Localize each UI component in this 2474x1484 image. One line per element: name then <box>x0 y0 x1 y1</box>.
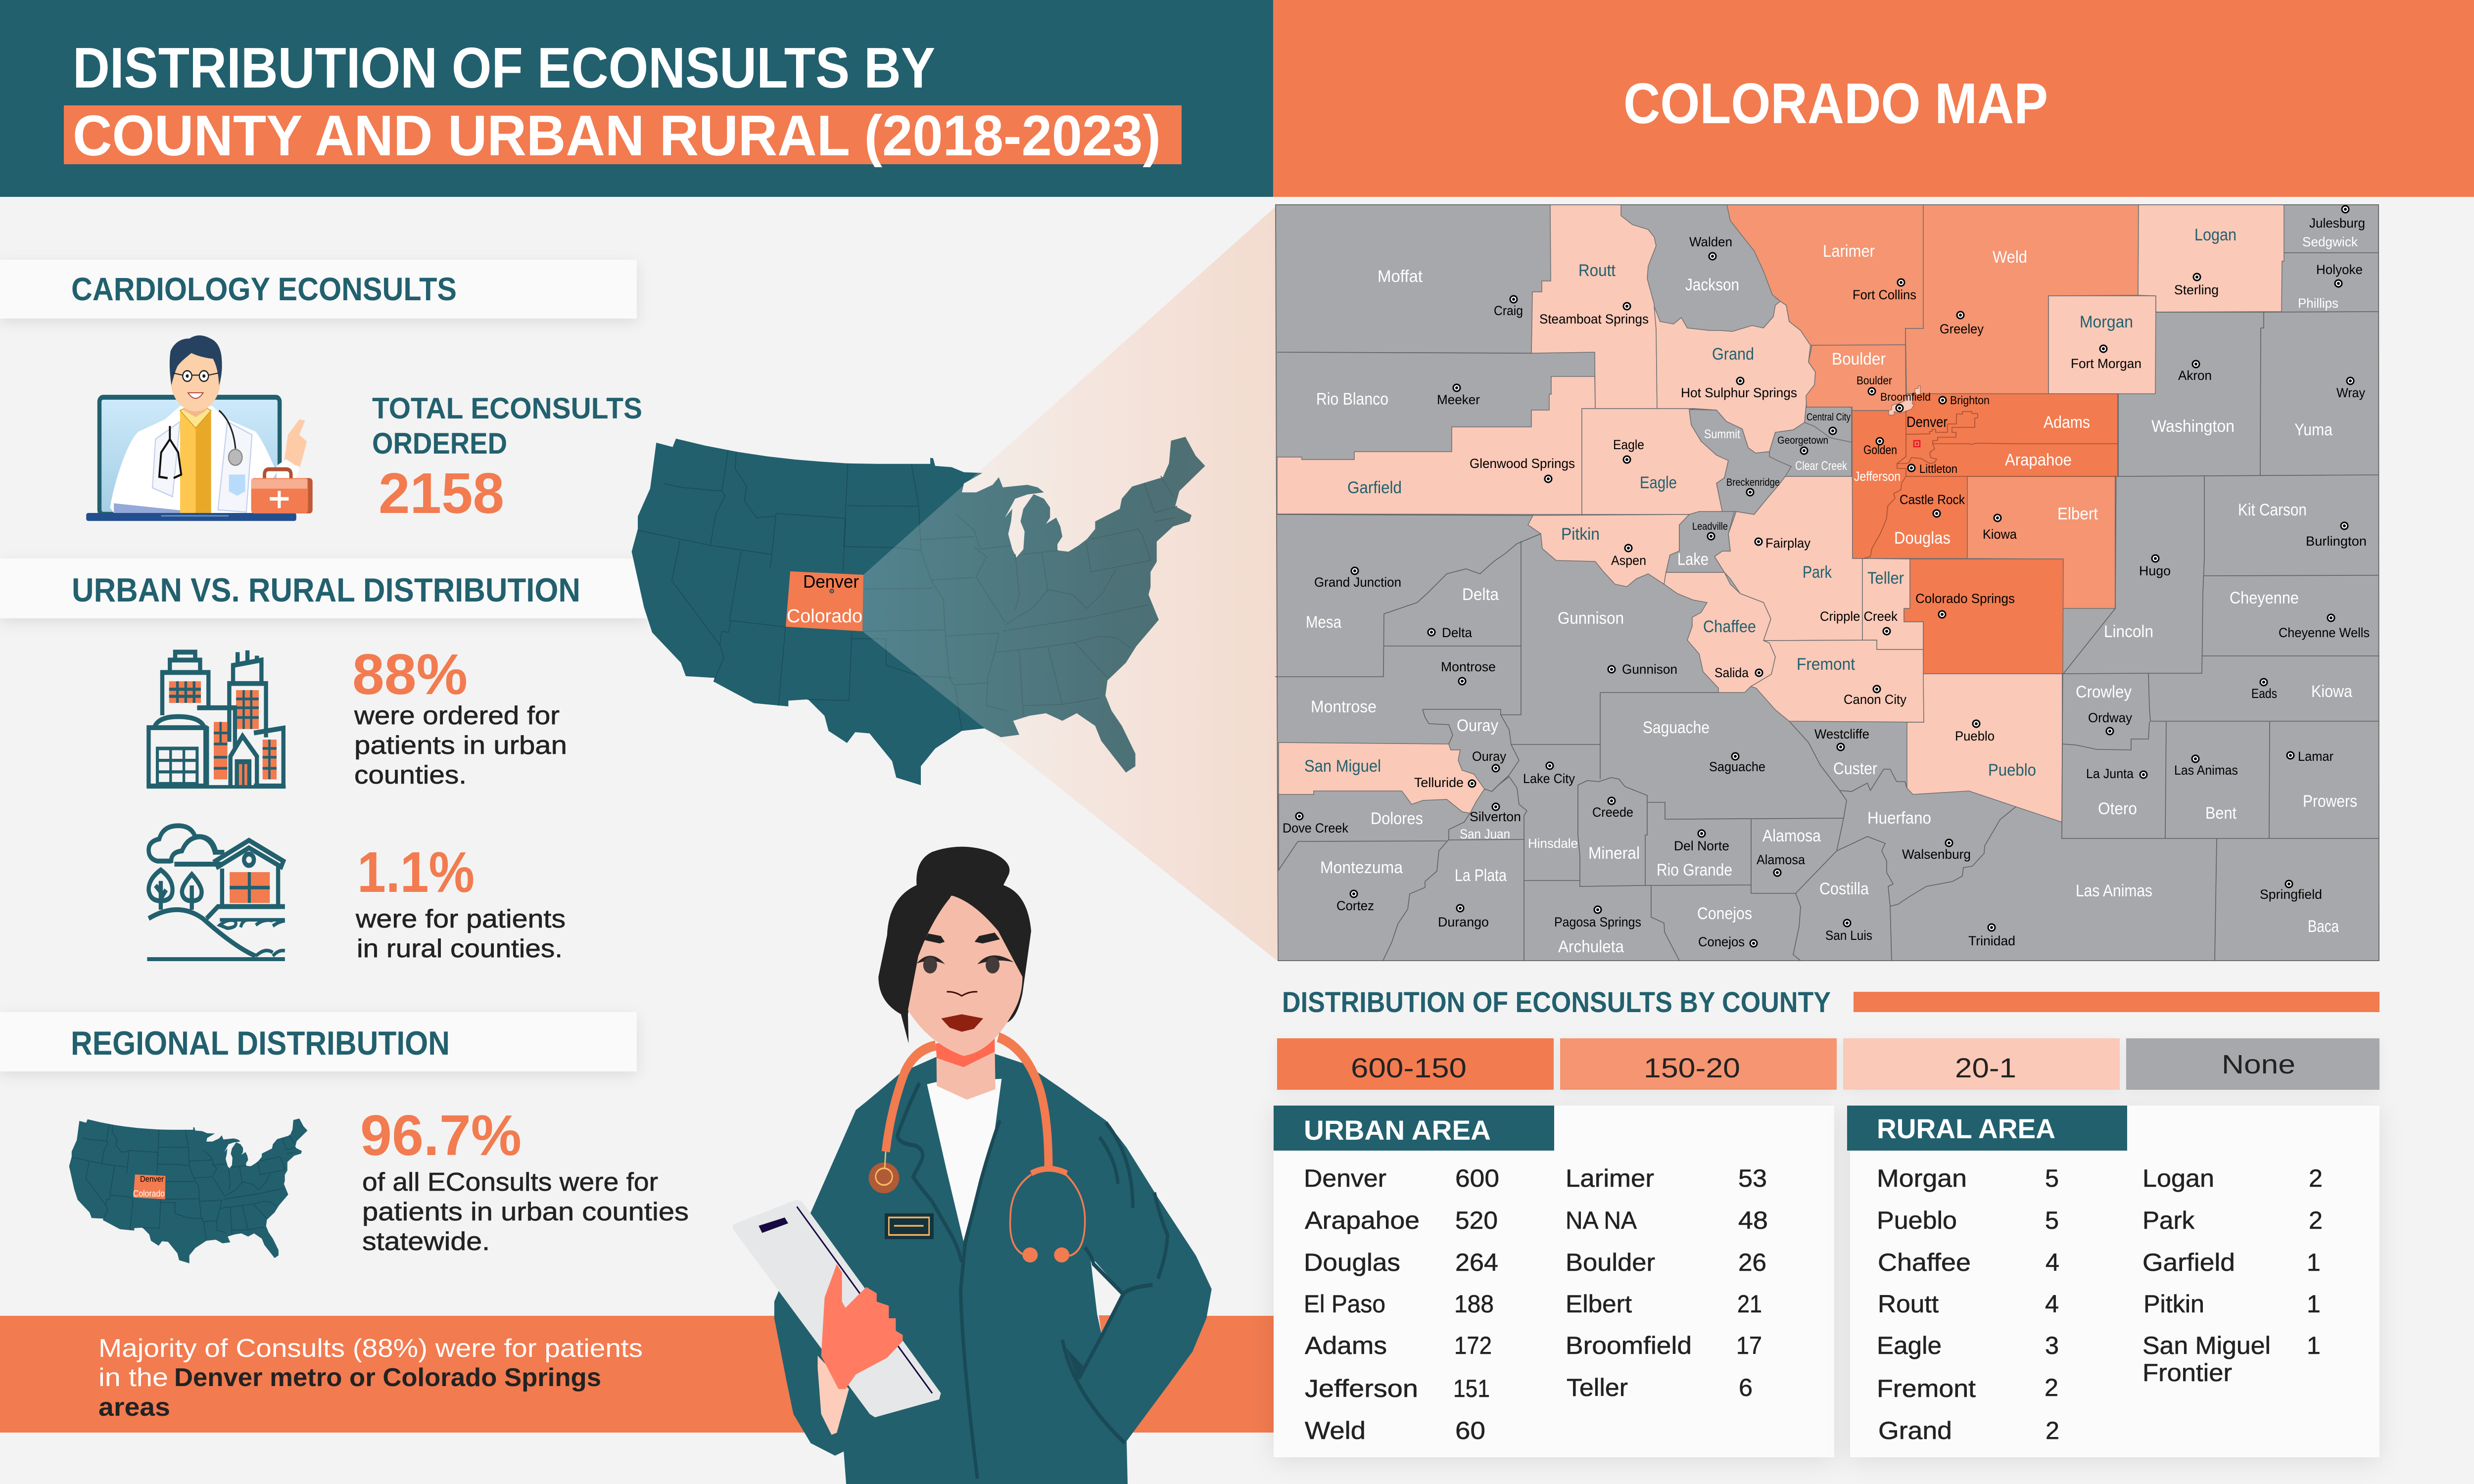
urban area rows: El Paso <box>1304 1290 1385 1318</box>
legend: None <box>2126 1038 2379 1090</box>
city name labels: Salida <box>1714 665 1749 680</box>
county name labels: Logan <box>2194 226 2236 244</box>
counties with 20-1 consults <box>1277 205 2284 822</box>
section heading: urban vs rural: URBAN VS. RURAL DISTRIBUTION <box>72 571 580 609</box>
city name labels: Cripple Creek <box>1820 609 1898 624</box>
urban area rows: NA NA <box>1566 1206 1637 1234</box>
callout band <box>0 1316 1274 1433</box>
stat: 96.7% regional <box>360 1103 689 1256</box>
rural area rows: 2 <box>2046 1417 2059 1444</box>
city name labels: Springfield <box>2260 887 2322 902</box>
county name labels: La Plata <box>1455 866 1507 885</box>
urban area rows: Denver <box>1304 1164 1386 1192</box>
county name labels <box>1304 226 2358 956</box>
rural area header: RURAL AREA <box>1877 1113 2055 1144</box>
county name labels: Dolores <box>1371 809 1423 828</box>
city name labels: Steamboat Springs <box>1539 312 1649 326</box>
rural area rows: 2 <box>2045 1374 2058 1401</box>
county name labels: Yuma <box>2294 420 2332 439</box>
stat: 1.1% rural <box>355 840 566 963</box>
city name labels: Lamar <box>2298 749 2333 764</box>
county name labels: Rio Blanco <box>1316 390 1388 409</box>
section heading: regional distribution <box>0 1012 637 1071</box>
urban area rows: Teller <box>1567 1374 1628 1401</box>
city name labels: Craig <box>1494 303 1523 318</box>
urban area rows: Weld <box>1305 1417 1366 1444</box>
rural area rows: 1 <box>2307 1290 2321 1318</box>
heading: distribution by county: DISTRIBUTION OF ECONSULTS BY COUNTY <box>1282 986 1831 1019</box>
city name labels: Castle Rock <box>1900 492 1965 507</box>
city name labels: Holyoke <box>2316 262 2363 277</box>
legend <box>1277 1038 2379 1090</box>
stat: 1.1% rural: were for patients <box>355 905 566 933</box>
urban area rows: 264 <box>1455 1249 1498 1276</box>
urban area rows: 48 <box>1738 1206 1768 1234</box>
county name labels: Pitkin <box>1561 525 1600 544</box>
Broomfield county <box>1889 386 1920 415</box>
legend: 600-150: 600-150 <box>1351 1052 1467 1083</box>
city name labels: Canon City <box>1844 692 1906 707</box>
city name labels: Cortez <box>1336 898 1374 913</box>
city name labels: Trinidad <box>1968 933 2015 948</box>
county name labels: Delta <box>1462 585 1499 604</box>
city name labels: Fort Morgan <box>2071 356 2141 371</box>
county name labels: Archuleta <box>1558 937 1624 956</box>
stat: 1.1% rural: in rural counties. <box>357 934 563 963</box>
rural area rows: Routt <box>1878 1290 1939 1318</box>
county name labels: Lake <box>1677 550 1709 569</box>
county name labels: Hinsdale <box>1528 836 1578 851</box>
county name labels: Gunnison <box>1558 609 1624 628</box>
stat: 96.7% regional: patients in urban counties <box>362 1198 689 1226</box>
stat: 88% urban: patients in urban <box>354 731 567 760</box>
city name labels: San Luis <box>1825 928 1872 943</box>
county name labels: San Miguel <box>1304 757 1381 776</box>
city name labels: Kiowa <box>1983 527 2017 542</box>
urban area rows: 520 <box>1455 1206 1498 1234</box>
county name labels: Lincoln <box>2104 622 2153 641</box>
urban area rows: Jefferson <box>1305 1375 1418 1402</box>
city name labels: Julesburg <box>2309 216 2365 231</box>
urban area rows: Larimer <box>1566 1164 1654 1192</box>
map banner heading <box>1273 0 2474 197</box>
county name labels: Grand <box>1712 345 1754 364</box>
urban area rows: Boulder <box>1566 1249 1655 1276</box>
rural area rows: 2 <box>2309 1164 2323 1192</box>
zoom wedge from Colorado to map <box>862 205 1277 961</box>
county name labels: Cheyenne <box>2230 589 2299 607</box>
panel: Colorado county map <box>1275 205 2379 961</box>
section heading: urban vs rural <box>0 558 648 618</box>
urban area rows: Elbert <box>1566 1290 1632 1318</box>
stat: 88% urban: counties. <box>354 761 467 789</box>
panel: rural area table <box>1847 1106 2379 1457</box>
urban area rows: 172 <box>1454 1332 1492 1359</box>
icon: city buildings <box>147 650 285 787</box>
county name labels: Washington <box>2151 417 2235 436</box>
city name labels: Burlington <box>2306 534 2367 549</box>
city name labels: Grand Junction <box>1314 575 1401 590</box>
rural area rows: 1 <box>2307 1249 2321 1276</box>
counties with 600-150 consults <box>1852 394 2118 674</box>
rural area rows: Garfield <box>2142 1249 2235 1276</box>
legend: 20-1: 20-1 <box>1955 1052 2016 1083</box>
city name labels: Alamosa <box>1757 852 1806 867</box>
rural area rows: Morgan <box>1877 1164 1967 1192</box>
rural area rows: 1 <box>2307 1332 2321 1359</box>
county name labels: San Juan <box>1460 827 1510 841</box>
city name labels: Fort Collins <box>1853 287 1916 302</box>
city name labels: Durango <box>1438 915 1489 929</box>
urban area rows: 600 <box>1455 1164 1499 1192</box>
city name labels: Cheyenne Wells <box>2279 625 2370 640</box>
rural area rows: Grand <box>1878 1417 1952 1444</box>
county name labels: Summit <box>1704 427 1740 441</box>
city name labels: Littleton <box>1919 463 1957 476</box>
stat: 88% urban: 88% <box>352 642 468 706</box>
urban area rows: 26 <box>1738 1249 1766 1276</box>
rural area rows: Park <box>2142 1206 2195 1234</box>
urban area rows: Douglas <box>1304 1249 1400 1276</box>
small US map: Colorado <box>133 1189 165 1199</box>
legend: 600-150 <box>1277 1038 1554 1090</box>
callout band: Majority of Consults (88%) were for patients <box>98 1334 643 1363</box>
rural area rows: Pueblo <box>1877 1206 1957 1234</box>
metro area border lines <box>1863 411 2118 558</box>
rural area rows: Pitkin <box>2143 1290 2204 1318</box>
county name labels: Elbert <box>2057 505 2098 523</box>
city name labels: Pueblo <box>1955 729 1995 743</box>
county name labels: Mesa <box>1306 613 1341 632</box>
stat: total econsults ordered: 2158 <box>379 461 504 525</box>
city name labels: Lake City <box>1523 771 1575 786</box>
city name labels: Denver <box>1906 414 1948 430</box>
rural area rows: Frontier <box>2142 1359 2232 1387</box>
county name labels: Phillips <box>2298 296 2338 311</box>
section heading: cardiology econsults: CARDIOLOGY ECONSULTS <box>71 271 457 307</box>
city name labels: Pagosa Springs <box>1554 915 1641 929</box>
county name labels: Larimer <box>1823 242 1875 261</box>
city name labels: Colorado Springs <box>1915 591 2015 606</box>
rural area rows: Chaffee <box>1878 1249 1971 1276</box>
county name labels: Sedgwick <box>2302 234 2358 249</box>
county name labels: Huerfano <box>1867 809 1931 828</box>
city name labels: Broomfield <box>1880 391 1931 403</box>
county name labels: Teller <box>1867 569 1904 588</box>
county name labels: Fremont <box>1797 655 1856 674</box>
rural area rows: 5 <box>2045 1164 2059 1192</box>
county name labels: Otero <box>2098 799 2137 818</box>
section heading: cardiology econsults <box>0 260 637 319</box>
county name labels: Boulder <box>1832 350 1886 369</box>
city name labels: Hugo <box>2139 563 2171 578</box>
county name labels: Conejos <box>1697 904 1752 923</box>
rural area rows: Eagle <box>1877 1332 1942 1359</box>
county name labels: Garfield <box>1347 478 1402 497</box>
panel: urban area table <box>1274 1106 1834 1457</box>
city name labels: La Junta <box>2086 766 2134 781</box>
county name labels: Moffat <box>1378 267 1423 286</box>
county name labels: Kit Carson <box>2238 501 2307 519</box>
county name labels: Baca <box>2308 917 2339 936</box>
stat: 96.7% regional: 96.7% <box>360 1103 522 1167</box>
stat: 96.7% regional: statewide. <box>362 1227 490 1256</box>
urban area rows: 60 <box>1455 1417 1485 1444</box>
county name labels: Las Animas <box>2076 881 2152 900</box>
city name labels: Dove Creek <box>1283 821 1348 835</box>
city name labels: Akron <box>2178 368 2212 383</box>
urban area rows: 21 <box>1737 1290 1762 1318</box>
US map with Colorado highlighted: Denver <box>803 571 859 592</box>
city name labels: Glenwood Springs <box>1470 456 1575 471</box>
city name labels: Las Animas <box>2174 763 2238 778</box>
city name labels: Ordway <box>2088 710 2132 725</box>
stat: 88% urban: were ordered for <box>354 701 560 730</box>
county name labels: Douglas <box>1894 529 1951 548</box>
stat: total econsults ordered <box>372 392 642 525</box>
city name labels: Gunnison <box>1622 662 1677 677</box>
county name labels: Montezuma <box>1320 858 1403 877</box>
city name labels: Greeley <box>1940 322 1984 336</box>
city name labels: Montrose <box>1441 659 1496 674</box>
county name labels: Custer <box>1833 759 1877 778</box>
urban area rows: 17 <box>1736 1332 1762 1359</box>
city name labels: Georgetown <box>1777 435 1828 446</box>
rural area rows: 4 <box>2045 1290 2059 1318</box>
stat: 96.7% regional: of all EConsults were for <box>362 1168 658 1197</box>
city name labels: Ouray <box>1472 749 1506 764</box>
county name labels: Rio Grande <box>1657 861 1732 880</box>
city name labels <box>1283 216 2370 949</box>
county name labels: Clear Creek <box>1795 459 1847 473</box>
stat: 88% urban <box>352 642 567 789</box>
urban area rows: 53 <box>1738 1164 1767 1192</box>
map banner heading: COLORADO MAP <box>1623 71 2048 136</box>
city name labels: Silverton <box>1470 809 1521 824</box>
city name labels: Walden <box>1689 234 1732 249</box>
county name labels: Mineral <box>1588 844 1640 863</box>
rural area rows: Logan <box>2142 1164 2214 1192</box>
icon: rural house <box>147 826 285 959</box>
stat: 1.1% rural: 1.1% <box>357 840 475 904</box>
urban area header: URBAN AREA <box>1304 1114 1491 1146</box>
county name labels: Routt <box>1578 261 1616 280</box>
US map with Colorado highlighted: Colorado <box>787 606 862 627</box>
heading: distribution by county <box>1282 986 2379 1019</box>
urban area rows: 6 <box>1739 1374 1753 1401</box>
rural area rows <box>1877 1164 2323 1444</box>
rural area header <box>1847 1106 2127 1151</box>
urban area rows: Broomfield <box>1566 1332 1692 1359</box>
legend: 150-20 <box>1560 1038 1837 1090</box>
city name labels: Delta <box>1442 625 1473 640</box>
county name labels: Morgan <box>2080 313 2133 331</box>
county name labels: Ouray <box>1457 716 1498 735</box>
county border lines <box>1275 253 2379 961</box>
county name labels: Crowley <box>2076 683 2132 701</box>
city name labels: Meeker <box>1437 392 1480 407</box>
urban area rows: Arapahoe <box>1305 1206 1420 1234</box>
city name labels: Leadville <box>1692 521 1728 532</box>
city name labels: Eagle <box>1613 437 1644 452</box>
title banner <box>0 0 1273 197</box>
city name labels: Del Norte <box>1674 838 1729 853</box>
county name labels: Prowers <box>2303 792 2357 811</box>
city name labels: Breckenridge <box>1726 477 1780 488</box>
county name labels: Jefferson <box>1854 469 1901 484</box>
callout band: in the <box>98 1363 168 1392</box>
city name labels: Conejos <box>1698 934 1745 949</box>
city name labels: Creede <box>1592 805 1633 820</box>
city name labels: Wray <box>2336 385 2365 400</box>
city name labels: Walsenburg <box>1902 847 1971 862</box>
city name labels: Telluride <box>1414 775 1464 790</box>
city name labels: Hot Sulphur Springs <box>1681 385 1797 400</box>
city name labels: Aspen <box>1611 553 1646 568</box>
US map with Colorado highlighted <box>631 437 1205 786</box>
county name labels: Bent <box>2205 804 2236 823</box>
icon: doctor on laptop <box>86 335 313 521</box>
legend: 20-1 <box>1843 1038 2120 1090</box>
rural area rows: 4 <box>2046 1249 2059 1276</box>
rural area rows: San Miguel <box>2142 1332 2271 1359</box>
county name labels: Eagle <box>1640 473 1677 492</box>
section heading: regional distribution: REGIONAL DISTRIBUTION <box>71 1024 450 1062</box>
urban area rows: 151 <box>1453 1375 1490 1402</box>
rural area rows: 3 <box>2045 1332 2059 1359</box>
city name labels: Eads <box>2251 686 2277 701</box>
counties with 150-20 consults <box>1727 205 2139 608</box>
city name labels: Fairplay <box>1765 536 1810 551</box>
city name labels: Boulder <box>1856 374 1892 387</box>
city name labels: Saguache <box>1709 759 1765 774</box>
small US map: Denver <box>140 1174 164 1184</box>
county name labels: Pueblo <box>1988 761 2036 780</box>
county name labels: Alamosa <box>1762 827 1821 845</box>
county name labels: Arapahoe <box>2005 451 2072 469</box>
county name labels: Adams <box>2044 413 2090 432</box>
county name labels: Costilla <box>1819 880 1869 898</box>
illustration: nurse with clipboard <box>733 847 1212 1484</box>
urban area rows: 188 <box>1454 1290 1494 1318</box>
rural area rows: 5 <box>2045 1206 2059 1234</box>
urban area header <box>1274 1106 1554 1151</box>
county name labels: Montrose <box>1311 697 1377 716</box>
county name labels: Weld <box>1993 248 2027 267</box>
urban area rows <box>1304 1164 1768 1444</box>
city name labels: Golden <box>1863 443 1897 457</box>
city markers <box>1296 206 2354 947</box>
county name labels: Park <box>1803 563 1832 582</box>
county name labels: Saguache <box>1643 718 1710 737</box>
stat: total econsults ordered: ORDERED <box>372 427 507 460</box>
county name labels: Chaffee <box>1703 617 1756 636</box>
callout band: areas <box>98 1393 170 1422</box>
county name labels: Jackson <box>1685 276 1739 294</box>
rural area rows: Fremont <box>1877 1375 1976 1402</box>
capital marker: Denver <box>1914 441 1920 447</box>
city name labels: Westcliffe <box>1814 727 1869 742</box>
legend: 150-20: 150-20 <box>1644 1052 1740 1083</box>
small US map <box>69 1118 307 1263</box>
city name labels: Central City <box>1807 412 1851 423</box>
stat: total econsults ordered: TOTAL ECONSULTS <box>372 392 642 425</box>
title banner: COUNTY AND URBAN RURAL (2018-2023) <box>73 103 1161 168</box>
county base in grey <box>1276 205 2379 961</box>
urban area rows: Adams <box>1305 1332 1387 1359</box>
grey mountain counties <box>1666 407 1852 572</box>
county name labels: Kiowa <box>2311 682 2352 701</box>
callout band: Denver metro or Colorado Springs <box>174 1363 601 1392</box>
legend: None: None <box>2222 1050 2295 1079</box>
title banner: DISTRIBUTION OF ECONSULTS BY <box>73 36 935 100</box>
city name labels: Sterling <box>2174 282 2219 297</box>
city name labels: Brighton <box>1950 394 1990 407</box>
rural area rows: 2 <box>2309 1206 2323 1234</box>
